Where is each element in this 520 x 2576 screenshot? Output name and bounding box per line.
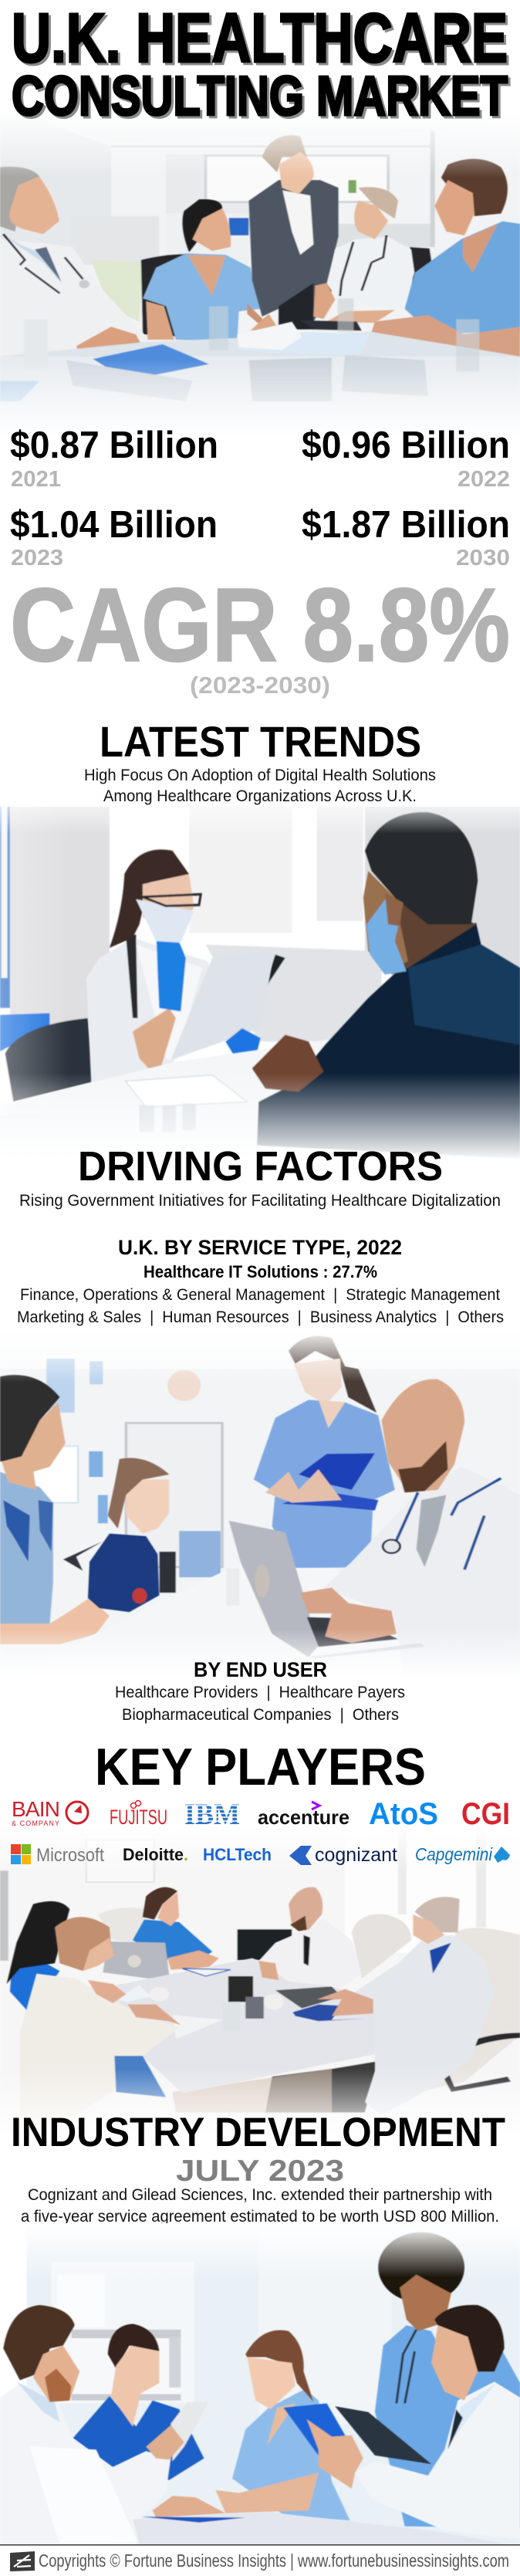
- photo: clinicians reviewing tablets: [0, 2221, 520, 2545]
- latest trends text: Among Healthcare Organizations Across U.K.: [103, 787, 417, 805]
- logo: Capgemini: Capgemini: [415, 1844, 493, 1864]
- person: mother: [0, 1375, 110, 1644]
- person: senior woman: [20, 1917, 181, 2123]
- stat: 2030 value: 2030: [456, 546, 510, 570]
- latest trends text: [84, 767, 436, 805]
- stat: 2023 value: 2023: [11, 546, 63, 570]
- logo: Bain & Company: [12, 1797, 88, 1827]
- segment: service type: [17, 1236, 504, 1326]
- table surface: [133, 2512, 511, 2544]
- segment: end user: [115, 1658, 405, 1724]
- white consulting table: [14, 1039, 329, 1132]
- logo: Deloitte: Deloitte.: [123, 1845, 188, 1864]
- stat: 2030 value: $1.87 Billion: [302, 504, 510, 546]
- title: [12, 0, 510, 130]
- person: nurse behind laptop: [103, 1887, 219, 1982]
- logo: HCLTech: HCLTech: [203, 1845, 272, 1864]
- segment: service type: Finance, Operations & General Management | Strategic Management: [20, 1286, 500, 1304]
- table with supplies: [116, 1958, 375, 2094]
- logo: Microsoft: [11, 1844, 104, 1866]
- person: nurse in blue scrubs: [143, 199, 265, 342]
- segment: end user: Healthcare Providers | Healthcare Payers: [115, 1684, 405, 1701]
- glass meeting table: [0, 298, 520, 401]
- person: dark-haired doctor: [355, 2305, 520, 2539]
- stat: 2021 value: 2021: [11, 467, 61, 492]
- stat: 2022 value: 2022: [458, 467, 510, 492]
- heading: key players: KEY PLAYERS: [95, 1738, 426, 1796]
- person: senior doctor in white coat: [317, 1897, 495, 2115]
- heading: latest trends: LATEST TRENDS: [100, 717, 421, 766]
- person: nurse in dark blue scrubs: [73, 2324, 225, 2517]
- logo: Bain & Company: & COMPANY: [12, 1819, 59, 1827]
- exam room table: [91, 1567, 332, 1636]
- heading: driving factors: DRIVING FACTORS: [78, 1143, 443, 1190]
- person: center doctor: [258, 1887, 362, 1988]
- logo: Fujitsu: FUJITSU: [110, 1806, 167, 1829]
- blue tablet and clipboard: [284, 2403, 431, 2489]
- development text: Cognizant and Gilead Sciences, Inc. extended their partnership with: [28, 2186, 492, 2204]
- logo: Microsoft: Microsoft: [36, 1845, 104, 1866]
- stat: 2030 value: [302, 504, 510, 570]
- person: dark-haired colleague: [7, 1901, 69, 2013]
- logo: Cognizant: cognizant: [315, 1844, 397, 1866]
- document and glove: [171, 957, 273, 1060]
- person: masked patient: [252, 812, 520, 1159]
- logo: CGI: CGI: [461, 1797, 510, 1831]
- logo: Fujitsu: [110, 1800, 167, 1829]
- stat: 2023 value: $1.04 Billion: [10, 504, 218, 546]
- stat: 2023 value: [10, 504, 218, 570]
- person: masked doctor: [86, 849, 212, 1083]
- development date: JULY 2023: [176, 2155, 344, 2188]
- person: doctor with laptop: [227, 1379, 503, 1658]
- stat: 2021 value: $0.87 Billion: [10, 425, 218, 466]
- person: nurse in light blue: [216, 2330, 350, 2520]
- person: doctor with stethoscope: [327, 187, 415, 323]
- person: male nurse: [372, 159, 520, 357]
- latest trends text: High Focus On Adoption of Digital Health Solutions: [84, 767, 436, 784]
- photo: medical team meeting: [0, 130, 520, 411]
- segment: service type: U.K. BY SERVICE TYPE, 2022: [118, 1236, 402, 1259]
- stat: 2022 value: [302, 425, 510, 492]
- development text: a five-year service agreement estimated to be worth USD 800 Million.: [21, 2208, 499, 2226]
- CAGR figure: (2023-2030): [190, 672, 330, 699]
- logo: Atos: AtoS: [369, 1797, 438, 1831]
- logo: IBM: IBM: [184, 1798, 240, 1831]
- segment: end user: BY END USER: [194, 1658, 327, 1681]
- segment: service type: Marketing & Sales | Human Resources | Business Analytics | Others: [17, 1308, 504, 1326]
- driving factors text: Rising Government Initiatives for Facilitating Healthcare Digitalization: [19, 1192, 501, 1210]
- stat: 2021 value: [10, 425, 218, 492]
- logo: Accenture: accenture: [258, 1806, 349, 1829]
- segment: end user: Biopharmaceutical Companies | Others: [122, 1706, 399, 1724]
- footer: [0, 2544, 520, 2571]
- person: senior doctor: [0, 167, 150, 359]
- person: afro-haired nurse: [375, 2232, 520, 2527]
- icon: Fortune Business Insights logo: [10, 2551, 35, 2571]
- segment: service type: Healthcare IT Solutions : 27.7%: [144, 1262, 377, 1281]
- person: child: [88, 1458, 169, 1612]
- logo: Bain & Company: BAIN: [12, 1797, 60, 1821]
- photo: doctor consulting patient: [0, 807, 520, 1158]
- person: standing consultant: [248, 135, 339, 330]
- photo: clinic visit: [0, 1335, 520, 1658]
- development text: [21, 2186, 499, 2226]
- person: nurse with clipboard: [254, 1336, 395, 1569]
- photo: team around table: [0, 1840, 520, 2118]
- stat: 2022 value: $0.96 Billion: [302, 425, 510, 466]
- person: bearded doctor: [0, 2305, 184, 2545]
